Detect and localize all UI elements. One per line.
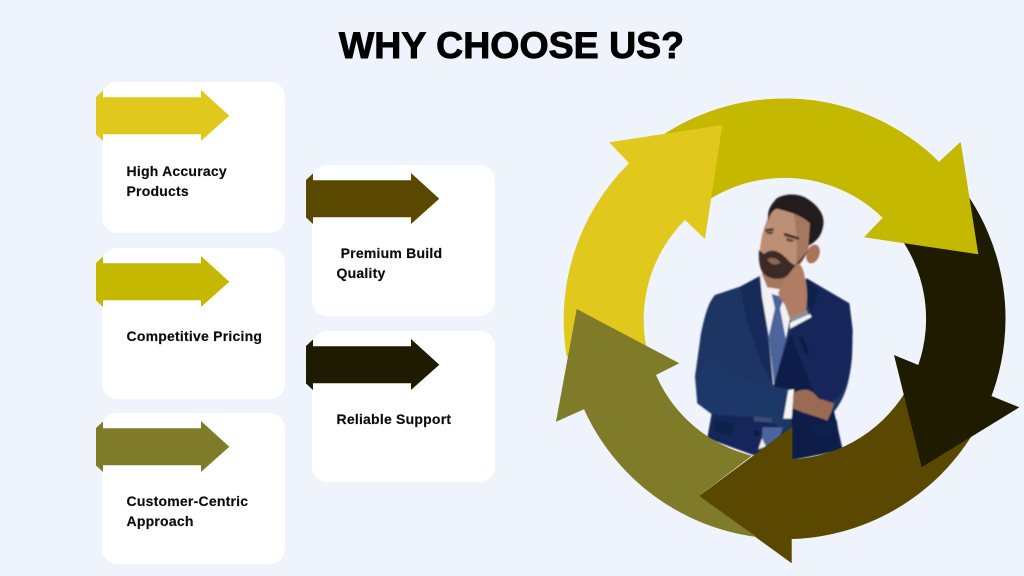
arrow: olive yellow segment xyxy=(660,98,978,254)
panel: Reliable Support xyxy=(306,331,495,482)
label text: Premium Build Quality xyxy=(336,245,442,281)
card background xyxy=(102,413,285,564)
raised hand xyxy=(778,263,807,319)
neck and head xyxy=(762,268,790,290)
icon: thinking businessman xyxy=(695,194,853,460)
arrow: yellow segment xyxy=(564,125,722,357)
jacket buttons xyxy=(798,336,809,355)
arrow: olive segment xyxy=(556,309,757,537)
arrow: yellow xyxy=(96,90,230,141)
shirt and tie xyxy=(760,275,791,386)
arrow: dark xyxy=(306,339,440,390)
arrow: olive xyxy=(96,421,230,472)
panel: Competitive Pricing xyxy=(96,248,285,399)
title: WHY CHOOSE US? xyxy=(339,24,684,66)
panel: High Accuracy Products xyxy=(96,82,285,233)
card background xyxy=(102,82,285,233)
label text: Customer-Centric Approach xyxy=(126,493,248,529)
arrow: brown xyxy=(306,173,440,224)
panel: Customer-Centric Approach xyxy=(96,413,285,564)
label text: High Accuracy Products xyxy=(126,163,227,199)
arrow: olive yellow xyxy=(96,256,230,307)
card background xyxy=(312,165,495,316)
arrow: brown segment xyxy=(699,384,980,563)
card background xyxy=(102,248,285,399)
panel: Premium Build Quality xyxy=(306,165,495,316)
arrow: dark segment xyxy=(894,184,1019,467)
label text: Reliable Support xyxy=(336,411,451,427)
jacket xyxy=(695,276,853,460)
card background xyxy=(312,331,495,482)
cuff and lower hand xyxy=(783,389,794,419)
label text: Competitive Pricing xyxy=(126,328,262,344)
